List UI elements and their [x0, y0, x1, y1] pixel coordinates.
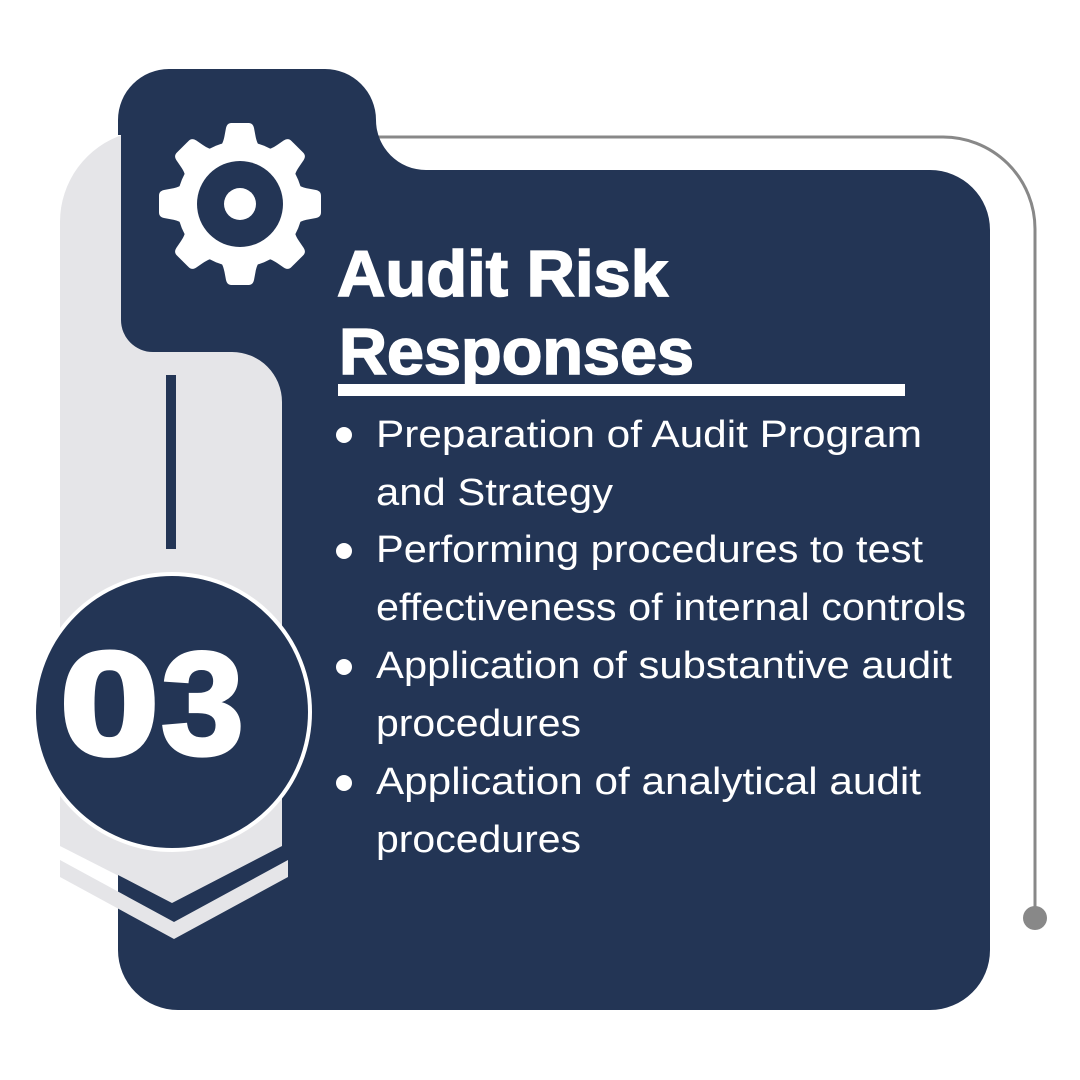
number badge: 3 [161, 622, 244, 785]
title: Responses [339, 315, 694, 388]
list item 2 [336, 529, 966, 629]
list item 3: procedures [376, 703, 581, 745]
list item 1 [336, 414, 922, 514]
list item 1: and Strategy [376, 472, 613, 514]
title [337, 237, 694, 388]
list item 2: effectiveness of internal controls [376, 587, 966, 629]
title underline [338, 384, 905, 396]
connector line with end dot [376, 137, 1047, 930]
title: Audit Risk [337, 237, 669, 310]
panel: navy main card [118, 69, 990, 1010]
vertical accent bar [166, 375, 176, 549]
list item 2: Performing procedures to test [376, 529, 923, 571]
list item 4: Application of analytical audit [376, 761, 921, 803]
panel: grey side ribbon [60, 134, 282, 903]
list item 3: Application of substantive audit [376, 645, 952, 687]
list item 4: procedures [376, 819, 581, 861]
bullet list [336, 414, 966, 861]
icon: gear [159, 123, 321, 285]
number badge [34, 574, 310, 850]
list item 3 [336, 645, 952, 745]
number badge: 0 [60, 622, 159, 785]
list item 4 [336, 761, 921, 861]
list item 1: Preparation of Audit Program [376, 414, 922, 456]
chevron: lower grey stripe [60, 860, 288, 939]
